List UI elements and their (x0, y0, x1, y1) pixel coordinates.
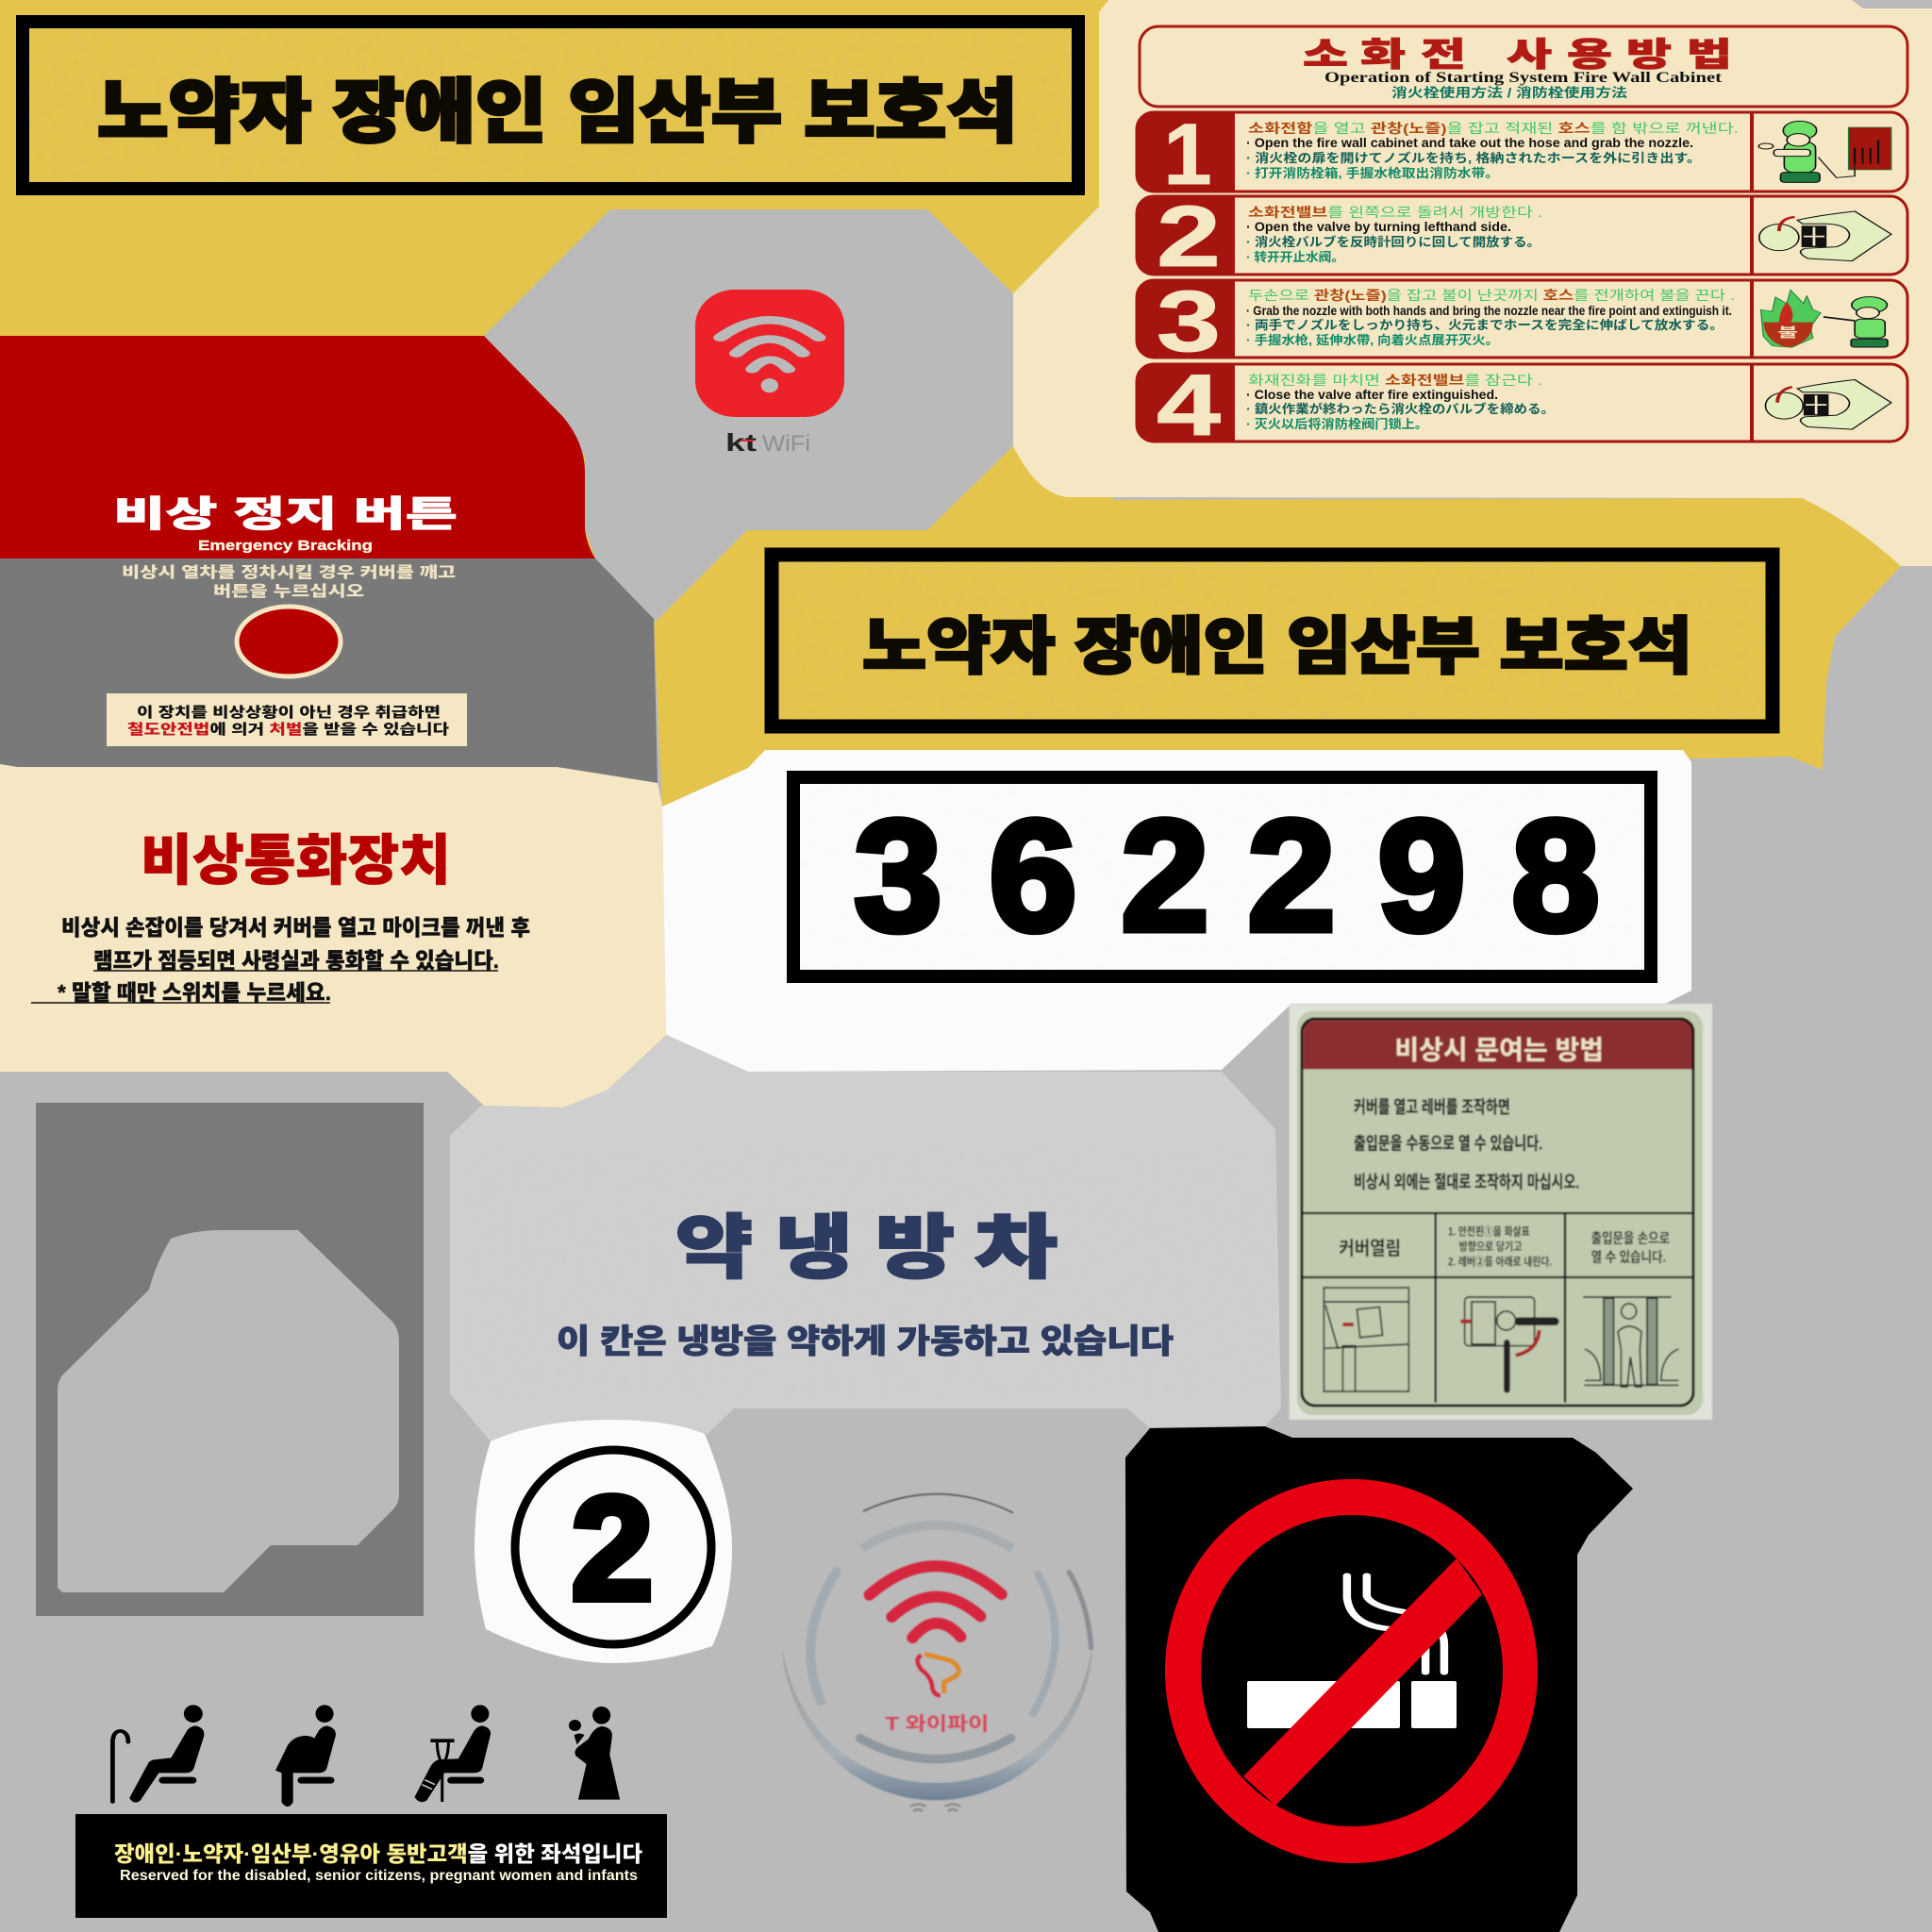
fire hydrant header: 용 (1567, 37, 1612, 74)
instructions: 버튼을 누르십시오 (213, 583, 364, 600)
warning box: 철도안전법 에 의거 처벌 을 받을 수 있습니다 (127, 721, 449, 738)
heading: emergency call: 비상통화장치 (141, 830, 451, 891)
diagram: cover (1324, 1288, 1408, 1391)
diagram: door (1583, 1297, 1678, 1387)
step 2 (1137, 189, 1907, 285)
icon: parent with infant (569, 1707, 620, 1800)
step 3: 두손으로 관창(노즐) 을 잡고 불이 난곳까지 호스 를 전개하여 불을 끈다 . (1248, 288, 1735, 303)
panel: cream fire hydrant background (1013, 0, 1932, 566)
door sign red header (1304, 1021, 1692, 1069)
panel: emergency stop gray body (0, 558, 658, 783)
number plate: 2 (1247, 787, 1336, 964)
number plate: 2 (1121, 787, 1209, 964)
icon: red stop button (237, 607, 341, 676)
step 1: · 打开消防栓箱, 手握水枪取出消防水带。 (1246, 166, 1499, 180)
step 4: · 鎮火作業が終わったら消火栓のバルブを締める。 (1246, 402, 1555, 416)
caption: emergency bracking: Emergency Bracking (198, 538, 373, 554)
step 2: 2 (1157, 189, 1221, 285)
number plate: 6 (989, 787, 1077, 964)
fire hydrant header (1140, 26, 1907, 107)
step 4: 화재진화를 마치면 소화전밸브 를 잠근다 . (1248, 373, 1542, 388)
step 2: · 消火栓バルブを反時計回りに回して開放する。 (1246, 235, 1541, 249)
step 2: 소화전밸브 를 왼쪽으로 돌려서 개방한다 . (1248, 205, 1542, 220)
instructions (122, 564, 456, 600)
panel: weak cooling car text (462, 1146, 1274, 1396)
step 3: · 手握水枪, 延伸水帶, 向着火点展开灭火。 (1246, 333, 1499, 347)
step 4: 4 (1157, 358, 1221, 454)
frame: gray empty sign frame (36, 1103, 424, 1616)
heading: priority seat: 노약자 장애인 임산부 보호석 (862, 611, 1692, 681)
icon: cigarette (1247, 1575, 1457, 1728)
banner: priority seat caption (75, 1814, 667, 1918)
step 3: · 両手でノズルをしっかり持ち、火元までホースを完全に伸ばして放水する。 (1246, 318, 1724, 332)
icon: kt wifi logo (695, 290, 844, 457)
step 3 (1137, 274, 1907, 370)
icon: circled number 2 (475, 1420, 732, 1663)
fire hydrant header: 소 (1303, 37, 1348, 74)
heading: weak cooling car: 약 (675, 1208, 753, 1287)
icon: fire and firefighter (1760, 290, 1888, 347)
step 4: · 灭火以后将消防栓阀门锁上。 (1246, 417, 1428, 431)
heading: weak cooling car: 냉 (775, 1208, 853, 1287)
fire hydrant header: 법 (1687, 37, 1732, 74)
step 2: · 转开开止水阀。 (1246, 250, 1344, 264)
step 1: · 消火栓の扉を開けてノズルを持ち, 格納されたホースを外に引き出す。 (1246, 151, 1701, 165)
step 1 (1137, 107, 1907, 203)
panel: emergency door sign: 커버를 열고 레버를 조작하면 (1354, 1097, 1510, 1117)
panel: emergency door sign: 출입문을 수동으로 열 수 있습니다. (1354, 1133, 1542, 1153)
instructions: 비상시 열차를 정차시킬 경우 커버를 깨고 (122, 564, 456, 581)
panel: emergency door sign: 열 수 있습니다. (1591, 1250, 1666, 1266)
step 4 (1137, 358, 1907, 454)
fire hydrant header: Operation of Starting System Fire Wall Cabinet (1324, 70, 1723, 86)
banner: priority seat caption: Reserved for the disabled, senior citizens, pregnant women and infants (120, 1868, 638, 1884)
panel: emergency door sign (1290, 1004, 1712, 1420)
number plate: 3 (854, 787, 942, 964)
icon: injured person with crutch (414, 1705, 491, 1802)
panel: emergency stop red header (0, 336, 595, 558)
icon: T wifi logo (781, 1494, 1092, 1811)
icon: fire and firefighter: 불 (1778, 325, 1798, 341)
panel: emergency door sign: 방향으로 당기고 (1459, 1241, 1523, 1254)
step 1: 1 (1163, 107, 1212, 203)
fire hydrant header: 사 (1507, 37, 1552, 74)
icon: firefighter and cabinet (1758, 121, 1891, 182)
panel: emergency door sign: 1. 안전핀①을 화살표 (1448, 1224, 1530, 1238)
body text: 비상시 손잡이를 당겨서 커버를 열고 마이크를 꺼낸 후 (61, 915, 530, 940)
heading: priority seat: 노약자 장애인 임산부 보호석 (97, 73, 1018, 151)
fire hydrant header: 전 (1421, 37, 1466, 74)
number plate (793, 777, 1651, 976)
fire hydrant header: 화 (1360, 37, 1406, 74)
panel: emergency door sign: 2. 레버②를 아래로 내린다. (1448, 1256, 1552, 1269)
number plate: 8 (1511, 787, 1600, 964)
fire hydrant header: 방 (1626, 37, 1672, 74)
fire hydrant header: 消火栓使用方法 / 消防栓使用方法 (1391, 85, 1628, 100)
panel: emergency door sign: 출입문을 손으로 (1591, 1230, 1670, 1246)
panel: yellow background (0, 0, 1901, 807)
icon: hand opening valve (1759, 211, 1891, 261)
red prohibition ring and slash (1165, 1479, 1538, 1863)
banner: priority seat caption: 장애인·노약자·임산부·영유아 동반고객 을 위한 좌석입니다 (114, 1841, 642, 1866)
icon: hand closing valve (1765, 379, 1891, 429)
banner: priority seat top (23, 22, 1078, 189)
heading: weak cooling car (675, 1208, 1058, 1287)
step 2: · Open the valve by turning lefthand side. (1246, 220, 1511, 234)
icon: pregnant woman (275, 1705, 336, 1807)
body text (31, 915, 530, 1005)
diagram: lever (1460, 1297, 1555, 1390)
number plate: 9 (1377, 787, 1466, 964)
icon: no smoking sign (1125, 1426, 1633, 1932)
heading: emergency stop: 비상 정지 버튼 (113, 495, 458, 535)
panel: emergency call device text (31, 830, 530, 1005)
step 3: 3 (1157, 274, 1221, 370)
banner: priority seat middle (772, 555, 1773, 726)
icon: elderly person with cane (112, 1705, 204, 1803)
caption: weak cooling note: 이 칸은 냉방을 약하게 가동하고 있습니다 (557, 1324, 1174, 1360)
body text: 램프가 점등되면 사령실과 통화할 수 있습니다. (93, 948, 499, 973)
heading: weak cooling car: 방 (875, 1208, 955, 1287)
icon: priority seat pictograms (112, 1705, 620, 1807)
panel: cream emergency call background (0, 764, 666, 1108)
step 3: · Grab the nozzle with both hands and bring the nozzle near the fire point and extinguish it. (1246, 304, 1732, 318)
panel: fire hydrant instructions (1137, 26, 1907, 454)
step 1: · Open the fire wall cabinet and take out the hose and grab the nozzle. (1246, 136, 1693, 150)
panel: emergency stop button text (107, 495, 467, 746)
icon: kt wifi logo: kt (725, 428, 757, 457)
icon: kt wifi logo: WiFi (762, 431, 810, 457)
panel: emergency door sign: 커버열림 (1339, 1238, 1401, 1259)
icon: circled number 2: 2 (572, 1467, 653, 1631)
panel: gray octagon behind kt wifi (484, 209, 1013, 623)
panel: white number plate background (662, 750, 1691, 1072)
step 1: 소화전함 을 열고 관창(노즐) 을 잡고 적재된 호스 를 함 밖으로 꺼낸다. (1248, 121, 1739, 136)
step 4: · Close the valve after fire extinguished. (1246, 388, 1498, 402)
warning box: 이 장치를 비상상황이 아닌 경우 취급하면 (137, 704, 441, 721)
panel: light gray weak cooling background (450, 1036, 1281, 1441)
body text: * 말할 때만 스위치를 누르세요. (58, 980, 331, 1005)
panel: emergency door sign: 비상시 외에는 절대로 조작하지 마십시오. (1354, 1172, 1579, 1191)
panel: emergency door sign: 비상시 문여는 방법 (1394, 1036, 1604, 1065)
heading: weak cooling car: 차 (974, 1208, 1058, 1287)
icon: T wifi logo: T 와이파이 (885, 1713, 989, 1735)
warning box (107, 693, 467, 746)
